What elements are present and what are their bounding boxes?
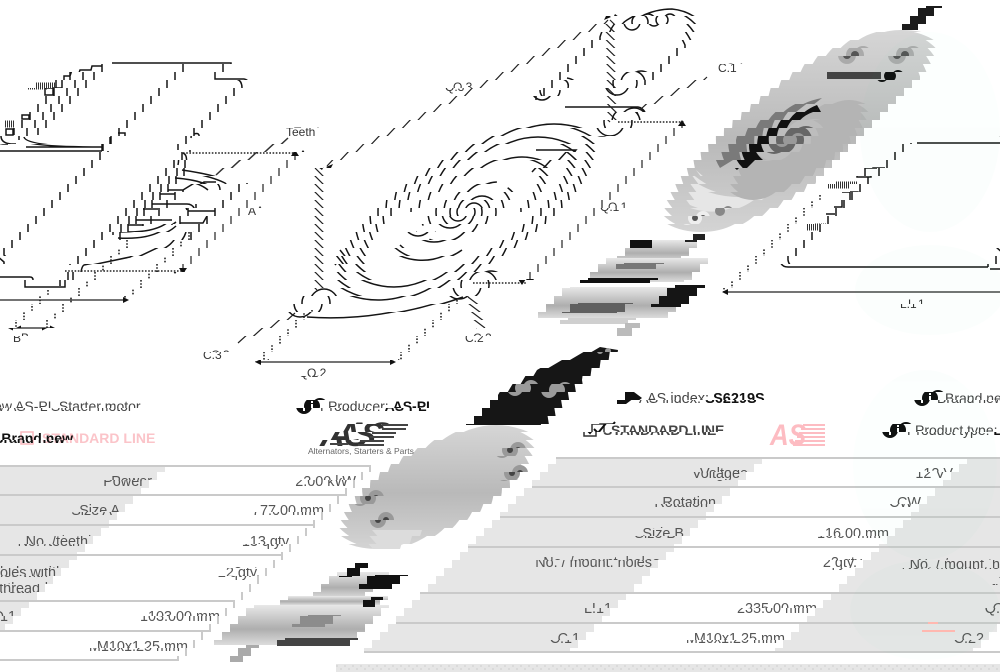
logo: pink AS mark: AS <box>769 419 806 452</box>
badge: pink standard line: STANDARD LINE <box>42 430 155 446</box>
